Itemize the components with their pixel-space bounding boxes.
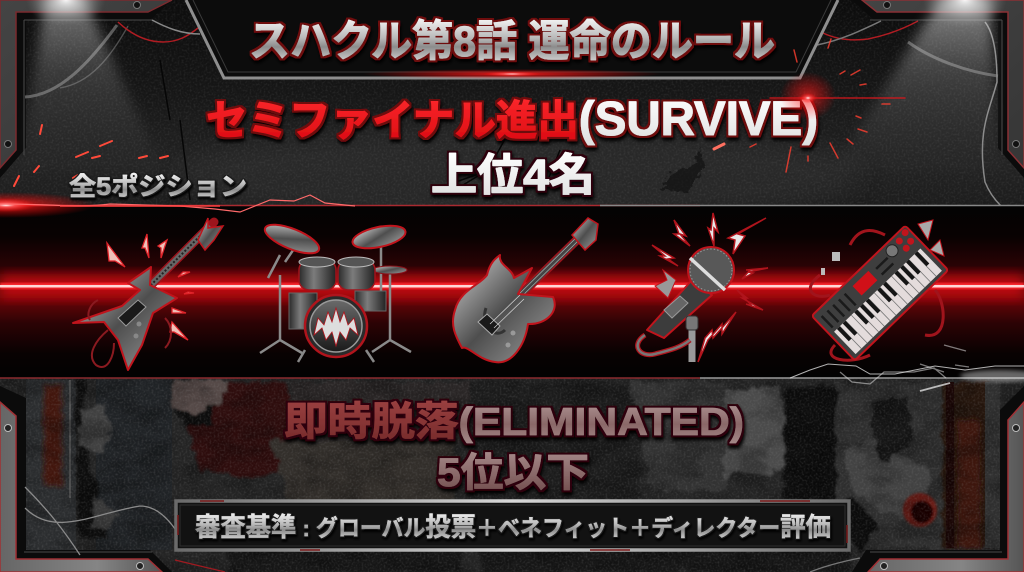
laser line: [0, 274, 1024, 298]
background: lower grunge wall: [0, 378, 1024, 572]
icon: electric guitar: [73, 218, 223, 370]
sparks: upper right: [714, 39, 905, 172]
icon: bass guitar: [453, 218, 598, 362]
criteria text: 審査基準 : グローバル投票＋ベネフィット＋ディレクター評価: [195, 512, 831, 542]
lightning: left top of band: [0, 125, 355, 218]
corner plate: top right: [852, 0, 1024, 178]
corner plate: bottom left: [0, 386, 225, 572]
criteria box: [176, 501, 849, 550]
subheading: top 4: 上位4名: [431, 151, 595, 200]
corner plate: top left: [0, 0, 172, 178]
title text: スハクル第8話 運命のルール: [249, 18, 775, 66]
cables: top corners: [25, 20, 1001, 206]
corner plate: bottom right: [810, 386, 1024, 572]
lightning: right bottom of band: [790, 345, 1024, 391]
label: all 5 positions: 全5ポジション: [69, 173, 247, 201]
icon: microphone: [638, 213, 768, 362]
rust hole: [903, 493, 937, 527]
heading: survive: セミファイナル進出(SURVIVE): [206, 93, 818, 146]
spotlight: right: [830, 0, 1007, 175]
icon: keyboard synth: [810, 220, 948, 360]
subheading: 5th and below: 5位以下: [437, 451, 589, 495]
icon: drum kit: [260, 219, 411, 362]
heading: eliminated: 即時脱落 (ELIMINATED): [284, 400, 744, 444]
title panel: [186, 0, 838, 79]
background: upper concrete wall: [0, 0, 1024, 225]
spotlight: left: [20, 0, 165, 175]
position band: [0, 206, 1024, 378]
